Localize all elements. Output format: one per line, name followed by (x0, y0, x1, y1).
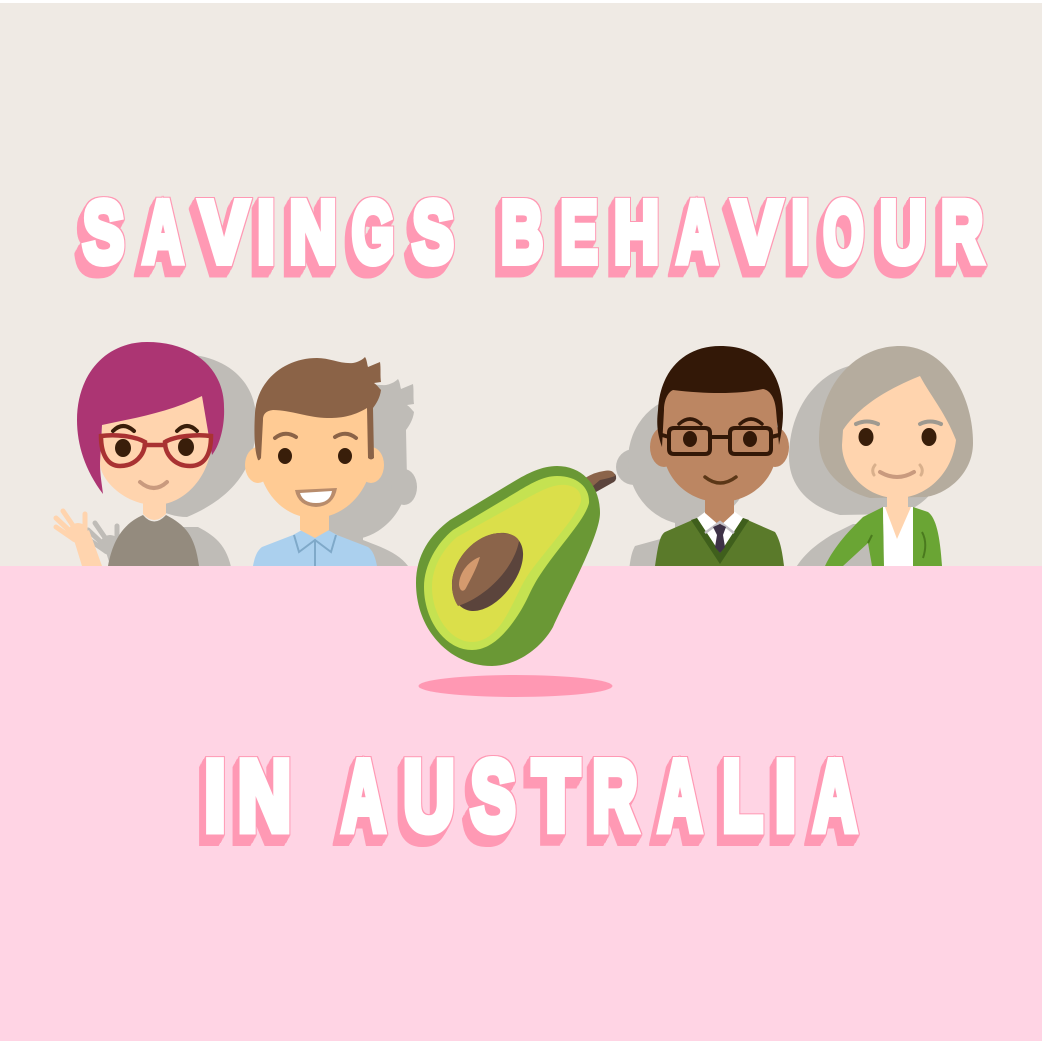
title: savings behaviour: E (560, 184, 598, 281)
icon: waving arm (56, 511, 102, 566)
title: in australia: I (775, 740, 796, 851)
hair (819, 346, 973, 498)
eyes (858, 428, 936, 446)
title: savings behaviour: I (257, 184, 275, 281)
title: in australia: I (204, 740, 226, 851)
title: savings behaviour: I (791, 184, 809, 281)
title: in australia: A (342, 740, 385, 851)
shirt (697, 512, 743, 553)
avocado inner flesh (432, 485, 581, 642)
tie (713, 524, 726, 553)
man face (258, 400, 372, 518)
avocado skin (416, 466, 600, 666)
title: in australia: A (814, 740, 856, 851)
title: in australia: U (404, 740, 454, 851)
woman sweater (108, 515, 199, 566)
figure: man with brown hair and blue shirt (245, 357, 384, 566)
figure: man with dark hair, glasses and green sweater (650, 346, 789, 566)
title: savings behaviour: G (352, 184, 394, 281)
eyebrows (856, 422, 941, 424)
title: savings behaviour: R (941, 184, 983, 281)
figure: shadow of woman with pink hair (88, 354, 256, 578)
glasses (662, 428, 779, 454)
title: savings behaviour: V (733, 184, 781, 281)
man shirt (253, 530, 377, 566)
man eyebrows (275, 434, 356, 438)
panel: beige upper background (0, 3, 1042, 567)
eyebrows (679, 419, 762, 424)
collar lines (705, 522, 734, 533)
hair (657, 346, 783, 447)
title: savings behaviour: O (824, 184, 864, 281)
icon: avocado shadow (418, 675, 612, 697)
title: in australia: S (471, 740, 515, 851)
mouth (880, 472, 914, 477)
man hair (254, 357, 381, 460)
title: in australia: A (658, 740, 702, 851)
title: savings behaviour: V (200, 184, 248, 281)
title: savings behaviour: A (677, 184, 717, 281)
title: in australia: N (238, 740, 291, 851)
avocado pit (452, 533, 523, 611)
man eyes (278, 448, 352, 464)
woman glasses (101, 435, 211, 466)
cheek lines (873, 465, 922, 475)
avocado stem (585, 471, 616, 492)
figure: older woman with grey hair and green cardigan (819, 346, 973, 566)
title: savings behaviour: U (880, 184, 926, 281)
woman neck (143, 495, 166, 520)
man collar (294, 535, 336, 566)
woman hair (77, 342, 224, 494)
panel: pink lower background (0, 566, 1042, 1041)
title: savings behaviour: N (290, 184, 336, 281)
title: savings behaviour: B (501, 184, 543, 281)
figure: shadow of man with dark hair (616, 395, 754, 586)
man neck (300, 510, 329, 538)
man smile (295, 488, 337, 507)
neck (885, 490, 911, 539)
title: in australia: L (722, 740, 762, 851)
woman face (100, 396, 212, 505)
title: savings behaviour: H (614, 184, 659, 281)
title: in australia: R (592, 740, 638, 851)
figure: shadow of older woman (789, 363, 943, 583)
woman eyes (115, 438, 194, 457)
cardigan (825, 507, 942, 566)
figure: shadow of man with brown hair (287, 379, 417, 566)
man ears (245, 447, 384, 483)
cardigan fold lines (868, 532, 925, 558)
title: savings behaviour: S (83, 184, 124, 281)
title: in australia: T (533, 740, 579, 851)
mouth (705, 477, 736, 483)
face (663, 385, 777, 502)
ears (650, 427, 789, 467)
icon: avocado (416, 466, 616, 666)
woman eyebrows (113, 426, 197, 431)
sweater (655, 518, 784, 566)
figure: woman with pink hair and red glasses (56, 342, 224, 566)
avocado light flesh (424, 476, 589, 650)
undershirt (883, 507, 913, 566)
neck (705, 495, 734, 526)
title: savings behaviour: A (143, 184, 183, 281)
sweater v-neck trim (691, 518, 749, 564)
eyes (683, 431, 757, 447)
woman mouth (140, 482, 167, 488)
face (842, 376, 956, 498)
title: savings behaviour: S (412, 184, 454, 281)
